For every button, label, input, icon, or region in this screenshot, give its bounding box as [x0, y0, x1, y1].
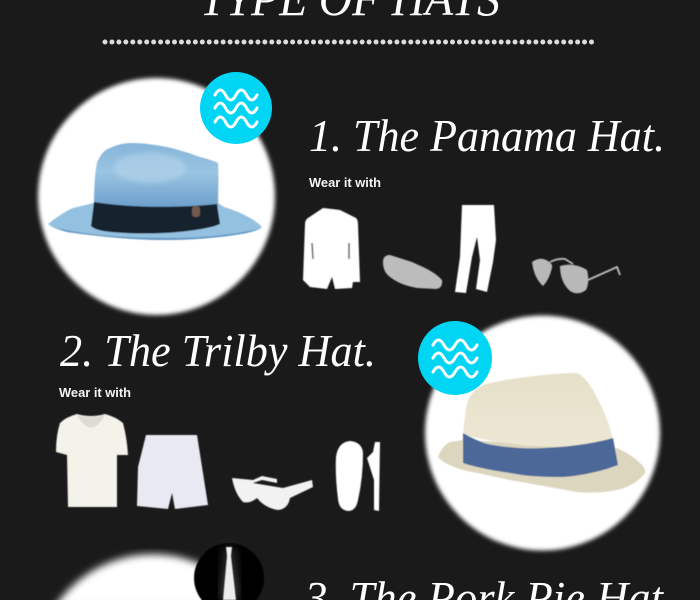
icon: aviator sunglasses: [532, 259, 620, 293]
icon: white t-shirt: [56, 414, 128, 507]
heading: panama: 1. The Panama Hat.: [309, 110, 665, 161]
icon: white trousers: [455, 205, 496, 293]
icon: tie badge: [194, 543, 264, 600]
icon: waves badge: [418, 321, 492, 395]
icon: white shorts: [137, 435, 208, 509]
circle: trilby background: [425, 316, 660, 550]
circle: pork pie background: [54, 554, 252, 600]
panel: panama hat: [38, 72, 665, 315]
icon: wayfarer sunglasses: [232, 476, 313, 510]
icon: trilby hat: [438, 373, 645, 493]
heading: trilby: 2. The Trilby Hat.: [60, 325, 376, 376]
icon: flip flops: [336, 441, 380, 511]
label: wear it with: Wear it with: [59, 385, 131, 400]
label: wear it with: Wear it with: [309, 175, 381, 190]
panel: pork pie hat: [54, 543, 664, 600]
panel: trilby hat: [56, 316, 660, 550]
circle: panama background: [38, 78, 275, 315]
icon: waves badge: [200, 72, 272, 144]
icon: panama hat: [48, 143, 262, 240]
icon: loafer shoe: [383, 255, 442, 289]
icon: white jacket: [303, 208, 360, 289]
